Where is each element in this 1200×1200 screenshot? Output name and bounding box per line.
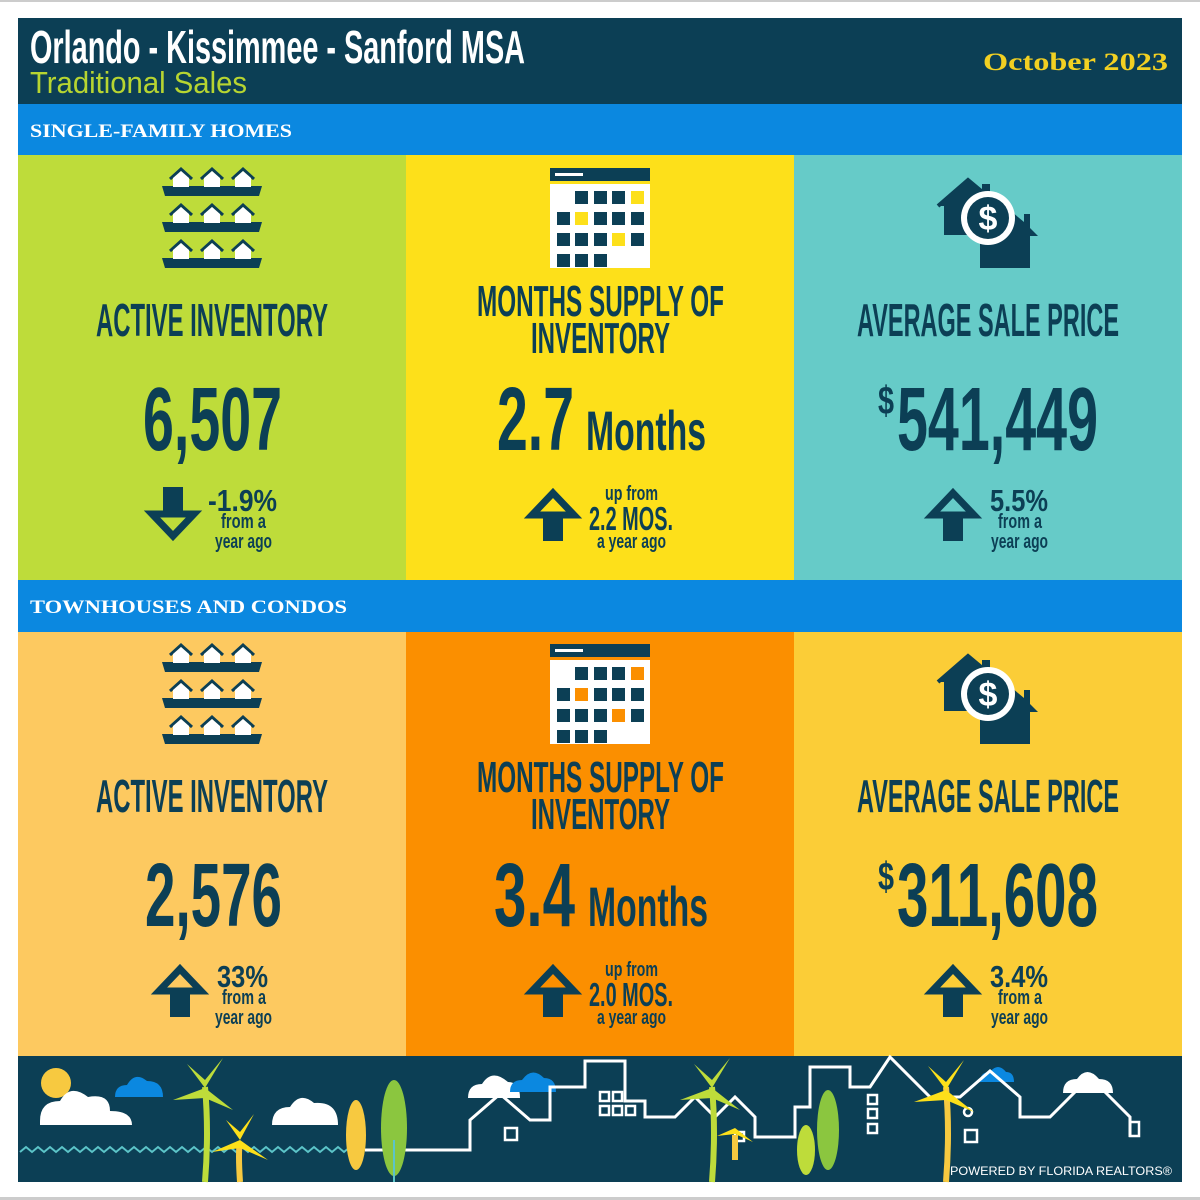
credit: POWERED BY FLORIDA REALTORS® [950,1164,1172,1178]
change: year ago [215,531,272,553]
change: 2.2 MOS. [589,500,673,537]
change [932,959,1048,1029]
value [494,846,708,946]
sun and clouds [40,1067,1113,1125]
change [159,959,272,1029]
value [878,846,1098,946]
heading: ACTIVE INVENTORY [96,770,328,822]
header [18,18,1182,104]
heading: INVENTORY [531,314,670,363]
value: $ [878,379,894,423]
date: October 2023 [983,49,1168,76]
change: up from [605,483,658,505]
change: up from [605,959,658,981]
section bar: townhouses [18,580,1182,632]
trees and palms [173,1058,974,1182]
title: Orlando - Kissimmee - Sanford MSA [30,21,525,73]
panel: TC active inventory [18,632,406,1056]
change: -1.9% [208,483,277,518]
change: from a [221,511,267,533]
change: year ago [991,531,1048,553]
icon: calendar [550,168,650,268]
change: a year ago [597,1007,666,1029]
change: year ago [991,1007,1048,1029]
section bar: single-family: SINGLE-FAMILY HOMES [30,121,292,142]
change: 2.0 MOS. [589,976,673,1013]
section bar: townhouses: TOWNHOUSES AND CONDOS [30,597,347,618]
subtitle: Traditional Sales [30,65,247,100]
heading: MONTHS SUPPLY OF [477,753,724,802]
footer: city illustration [18,1056,1182,1182]
buildings outline [365,1057,1130,1150]
heading [477,277,724,363]
panel: SF average sale price [794,155,1182,580]
section bar: single-family [18,104,1182,155]
value [497,370,706,470]
change: 33% [217,959,268,994]
heading: ACTIVE INVENTORY [96,294,328,346]
value: 3.4 [494,846,575,946]
change: year ago [215,1007,272,1029]
change [932,483,1048,553]
change [532,483,673,553]
value: $ [878,855,894,899]
heading [477,753,724,839]
heading: INVENTORY [531,790,670,839]
change: a year ago [597,531,666,553]
change [152,483,277,553]
change: from a [998,987,1043,1009]
value: Months [586,399,706,462]
icon: houses [162,169,262,268]
panel: TC months supply [406,632,794,1056]
frame lines [0,0,1200,2]
panel: SF months supply [406,155,794,580]
heading: MONTHS SUPPLY OF [477,277,724,326]
icon: dollar house [938,656,1038,744]
icon: calendar [550,644,650,744]
value: 2.7 [497,370,574,470]
change: 5.5% [990,483,1048,518]
value: Months [588,875,708,938]
value [878,370,1098,470]
water [20,1147,356,1152]
icon: houses [162,645,262,744]
change [532,959,673,1029]
icon: dollar house [938,180,1038,268]
change: from a [998,511,1043,533]
change: 3.4% [990,959,1048,994]
value: 2,576 [145,846,282,946]
value: 6,507 [143,370,282,470]
change: from a [222,987,267,1009]
panel: SF active inventory [18,155,406,580]
panel: TC average sale price [794,632,1182,1056]
